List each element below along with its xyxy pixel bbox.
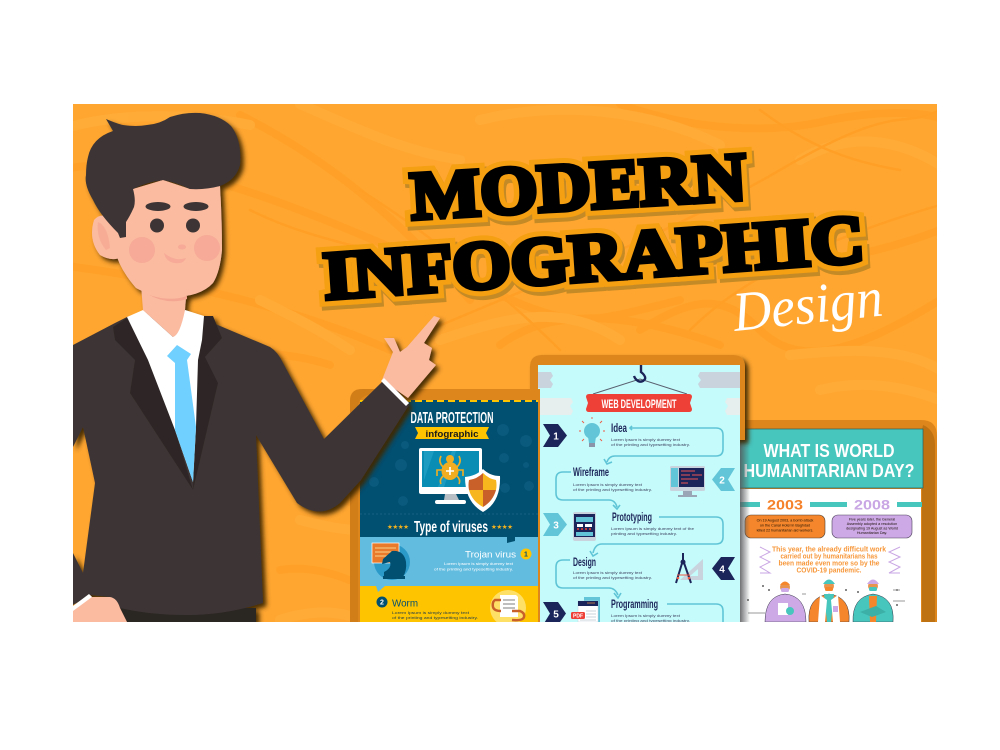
step: idea: [611, 421, 690, 447]
word: modern: MODERN: [408, 138, 748, 234]
year timeline: [740, 500, 922, 510]
panel: world humanitarian day: [739, 420, 937, 622]
top ribbons: [538, 372, 740, 415]
title banner: [586, 394, 692, 412]
jacket lapels: [113, 316, 222, 490]
year timeline: 2003: [767, 496, 803, 512]
step: prototyping: printing and typesetting industry.: [611, 531, 677, 536]
word: infographic: INFOGRAPHIC: [321, 200, 867, 314]
step 5: [543, 602, 566, 622]
step: design: [573, 555, 652, 580]
callout: 2003: On 19 August 2003, a bomb attack: [757, 518, 814, 522]
cheeks: [129, 235, 220, 263]
hair: [86, 113, 240, 238]
shield: [465, 469, 500, 512]
step: design: of the printing and typesetting industry.: [573, 575, 652, 580]
header band: HUMANITARIAN DAY?: [744, 460, 914, 481]
section: worm: Worm: [392, 598, 418, 610]
banner background: [60, 104, 940, 626]
ribbon: infographic: infographic: [426, 429, 478, 439]
character: presenter: [73, 113, 440, 622]
step 5: 5: [553, 610, 559, 620]
paragraph: been made even more so by the: [778, 560, 880, 568]
section: worm: of the printing and typesetting industry.: [392, 615, 478, 620]
face: [117, 180, 222, 297]
step: wireframe: Lorem Ipsum is simply dummy text: [573, 482, 643, 487]
zigzags: [760, 547, 900, 573]
step: prototyping: [611, 510, 695, 536]
ear: [92, 215, 122, 259]
subtitle: design: Design: [729, 267, 886, 344]
step: prototyping: Prototyping: [612, 510, 652, 524]
callout: 2008: designating 19 August as World: [846, 526, 898, 530]
panel background: [538, 365, 740, 622]
year timeline: 2008: [854, 496, 890, 512]
shirt: [127, 310, 204, 482]
icon: compass and ruler: [676, 553, 703, 583]
word: modern: MODERN: [411, 142, 751, 238]
section: worm: Lorem Ipsum is simply dummy text: [392, 610, 470, 615]
nose and mouth: [164, 244, 186, 263]
step 3: [543, 513, 567, 536]
step: wireframe: Wireframe: [573, 465, 609, 479]
header band: WHAT IS WORLD: [764, 440, 894, 461]
section heading: type of viruses: Type of viruses: [414, 519, 488, 536]
suit jacket: [73, 316, 409, 615]
person: teal: [853, 580, 893, 622]
icon: monitor: [670, 466, 705, 497]
callout: 2008: Humanitarian Day.: [857, 531, 887, 535]
step: prototyping: Lorem Ipsum is simply dummy text of the: [611, 526, 695, 531]
step 1: 1: [553, 432, 559, 442]
panel frame: [745, 420, 937, 622]
tie: [167, 345, 196, 482]
panel: data protection: [350, 389, 540, 626]
step: idea: Lorem Ipsum is simply dummy text: [611, 437, 681, 442]
step 4: [712, 557, 735, 580]
step: programming: Lorem Ipsum is simply dummy text: [611, 613, 681, 618]
step: programming: of the printing and typesetting industry.: [611, 618, 690, 623]
paragraph: [772, 546, 886, 574]
eyebrows: [146, 202, 208, 211]
icon: monitor with bug and shield: [419, 448, 500, 512]
connector paths: [556, 426, 723, 622]
step 1: [543, 424, 567, 447]
person: lilac: [765, 582, 806, 622]
number badge 2: [376, 596, 388, 608]
word: infographic: INFOGRAPHIC: [321, 200, 867, 314]
step 3: 3: [553, 520, 559, 532]
neck: [141, 285, 187, 337]
word: infographic: INFOGRAPHIC: [323, 204, 869, 318]
section: trojan virus: of the printing and typesetting industry.: [434, 566, 513, 572]
shirt cuff: [381, 378, 409, 406]
section heading: type of viruses: ★★★★: [387, 523, 409, 531]
ribbon: infographic: [415, 427, 489, 439]
step arrows: [543, 424, 735, 625]
pointing hand: [382, 316, 440, 398]
step 2: [712, 468, 735, 491]
panel frame: [350, 389, 540, 622]
icon: trojan horse: [372, 543, 410, 580]
left cuff: [73, 594, 92, 611]
person: orange: [809, 580, 849, 622]
callout: 2003: on the Canal Hotel in Baghdad: [760, 524, 810, 528]
white body: [740, 489, 921, 622]
icon: light bulb: [579, 417, 605, 447]
header band: [739, 429, 923, 488]
icon: tablet: [573, 512, 596, 541]
step: programming: [611, 599, 690, 622]
section: trojan virus: [360, 537, 538, 586]
section heading: type of viruses: ★★★★: [491, 523, 513, 531]
step: idea: Idea: [611, 421, 627, 435]
section: trojan virus: Lorem Ipsum is simply dummy text: [444, 561, 514, 566]
eyes: [150, 218, 200, 232]
step: wireframe: of the printing and typesetting industry.: [573, 487, 652, 492]
panel frame: [530, 354, 752, 447]
step: design: Lorem Ipsum is simply dummy text: [573, 570, 643, 575]
title: modern infographic: [321, 138, 869, 318]
paragraph: This year, the already difficult work: [772, 546, 886, 554]
left hand: [73, 597, 127, 622]
panel background: [360, 400, 538, 537]
step 4: 4: [719, 564, 725, 576]
number badge 2: 2: [380, 600, 384, 606]
panel: web development: [530, 355, 745, 625]
callout: 2003: killed 22 humanitarian aid workers.: [757, 528, 813, 532]
faint background icons: [369, 424, 534, 506]
step 2: 2: [719, 476, 725, 486]
section: worm: [360, 586, 538, 626]
bug: [437, 455, 463, 484]
word: modern: MODERN: [408, 138, 748, 234]
step: design: Design: [573, 555, 596, 569]
number badge 1: [520, 548, 532, 560]
number badge 1: 1: [524, 552, 528, 558]
callout: 2008: Assembly adopted a resolution: [847, 522, 897, 526]
heading: DATA PROTECTION: [410, 410, 494, 427]
icon: worm document: [490, 590, 526, 626]
section: trojan virus: Trojan virus: [465, 550, 517, 560]
icon: pdf document: [571, 597, 600, 622]
title banner: WEB DEVELOPMENT: [602, 397, 677, 411]
inner shadow: [740, 429, 750, 622]
callout: 2008: Five years later, the General: [849, 518, 895, 522]
hanger and hook: [593, 365, 687, 394]
people illustration: [747, 580, 905, 622]
paragraph: carried out by humanitarians has: [780, 554, 878, 560]
step: idea: of the printing and typesetting industry.: [611, 442, 690, 447]
callout: 2003: [745, 515, 825, 538]
step: programming: Programming: [611, 597, 658, 611]
paragraph: COVID-19 pandemic.: [796, 568, 862, 574]
trousers: [120, 608, 256, 622]
callout: 2008: [832, 515, 912, 538]
section heading: type of viruses: [387, 519, 513, 536]
step: wireframe: [573, 465, 652, 492]
icon: pdf document: PDF: [573, 614, 583, 620]
